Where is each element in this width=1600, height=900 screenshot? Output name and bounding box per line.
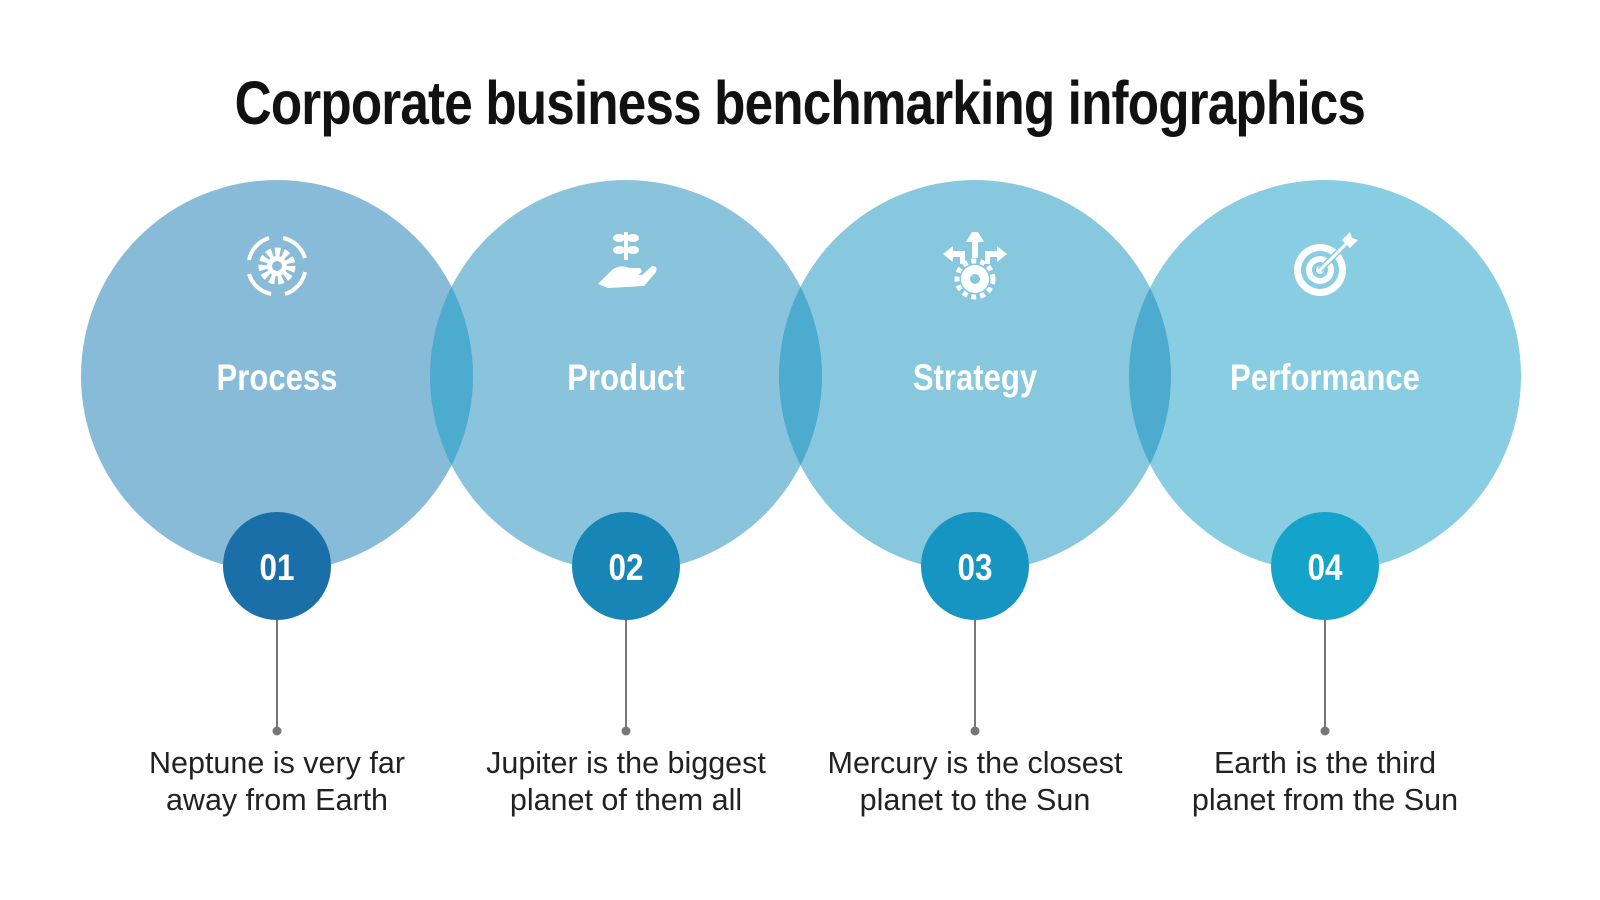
number badge 02 [572,512,680,620]
number badge 04: 04 [1308,548,1342,589]
title: Corporate business benchmarking infographics [235,69,1365,137]
text: Mercury: planet to the Sun [860,783,1090,817]
text: Mercury: Mercury is the closest [828,746,1122,780]
diagram: four overlapping circles [81,180,1521,736]
circle: process [81,180,473,572]
number badge 03: 03 [958,548,992,589]
text: Jupiter [486,746,766,817]
text: Jupiter: Jupiter is the biggest [486,746,766,780]
text: Earth: planet from the Sun [1192,783,1458,817]
text: Neptune: away from Earth [166,783,388,817]
circle: strategy [779,180,1171,572]
connector lines [274,615,1328,734]
label: Product: Product [567,358,685,399]
overlap lenses [430,180,1521,572]
label: Performance: Performance [1230,358,1420,399]
text: Jupiter: planet of them all [510,783,742,817]
number badge 01: 01 [260,548,294,589]
icon: hand with plant [598,232,656,288]
number badge 01 [223,512,331,620]
text: Neptune: Neptune is very far [149,746,405,780]
text: Neptune [149,746,405,817]
number badge 03 [921,512,1029,620]
number badge 02: 02 [609,548,643,589]
text: Earth [1192,746,1458,817]
text: Mercury [828,746,1122,817]
circle: performance [1129,180,1521,572]
label: Process: Process [217,358,337,399]
number badge 04 [1271,512,1379,620]
icon: gear with arrows [943,232,1007,297]
label: Strategy: Strategy [913,358,1037,399]
text: Earth: Earth is the third [1214,746,1436,780]
icon: target with dart [1294,232,1358,296]
icon: gear with cycle arrows [249,238,305,294]
circle: product [430,180,822,572]
